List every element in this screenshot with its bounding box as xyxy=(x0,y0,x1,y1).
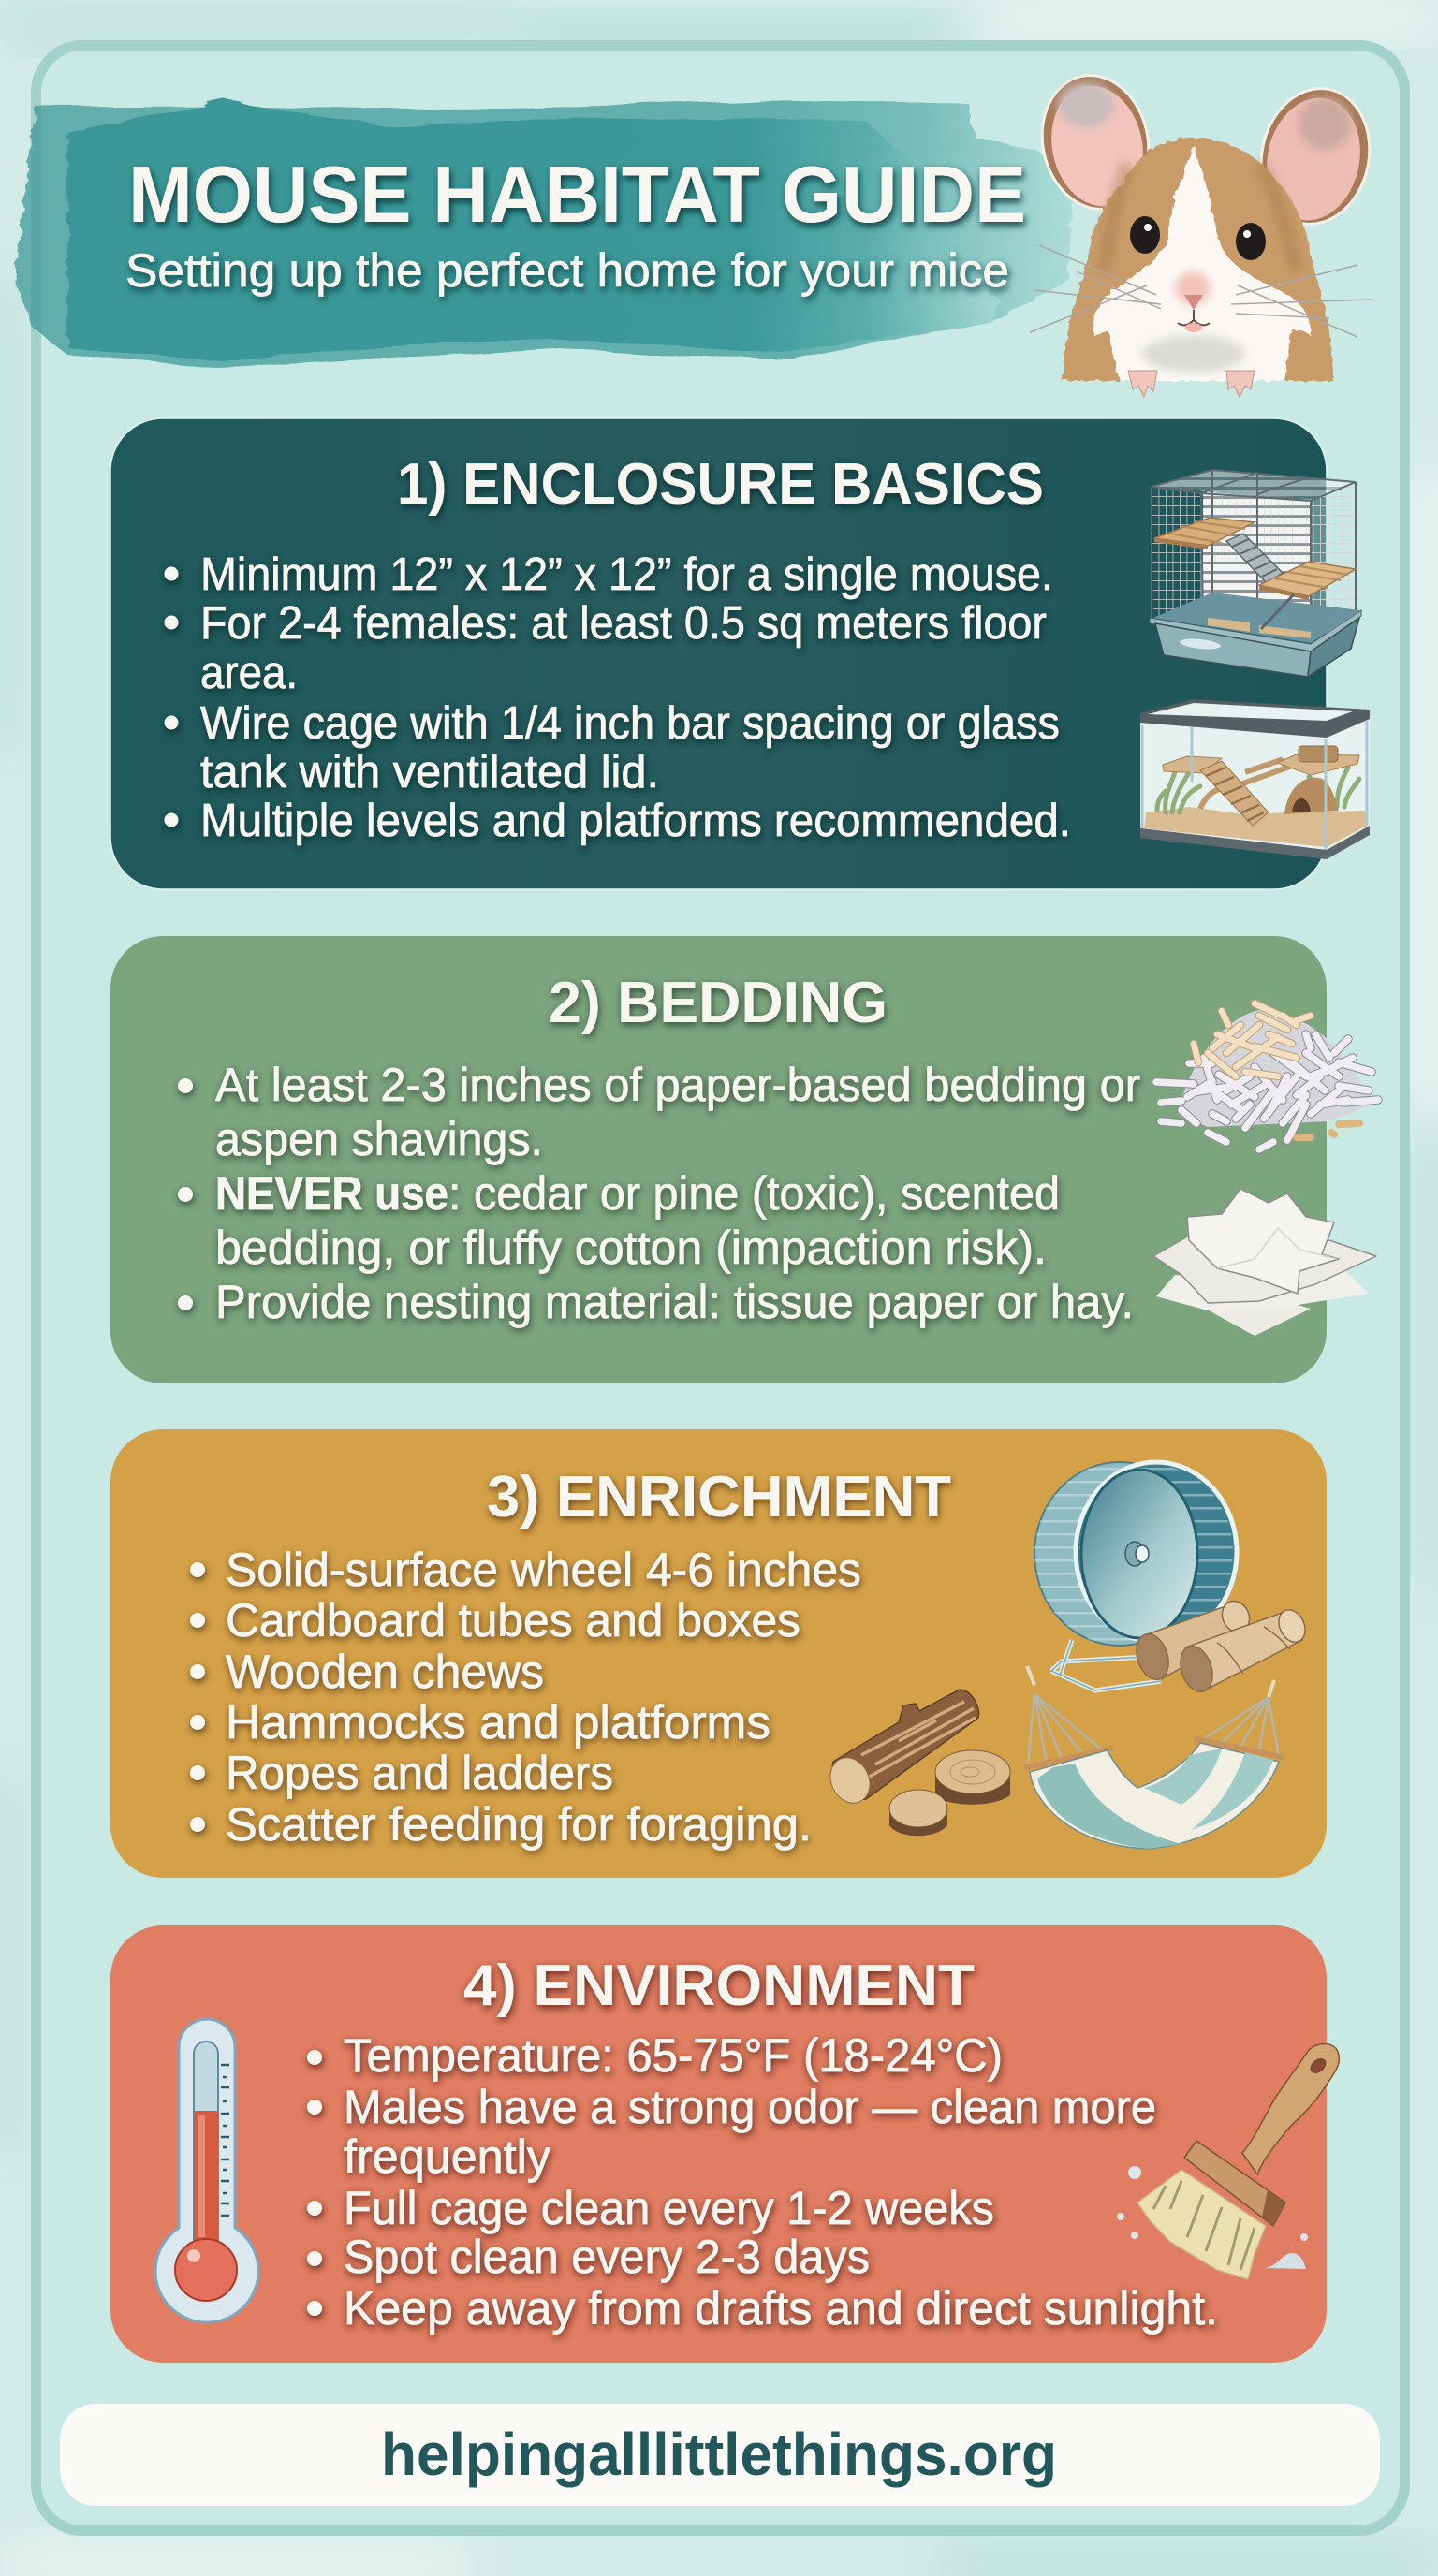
panel: enrichment xyxy=(110,1429,1327,1878)
icon: paper shavings xyxy=(1156,1003,1378,1149)
bullet list: enclosure basics: For 2-4 females: at least 0.5 sq meters floor xyxy=(200,598,1047,649)
bullet list: environment: Full cage clean every 1-2 weeks xyxy=(344,2182,994,2234)
bullet list: bedding xyxy=(178,1059,1140,1328)
bullet list: enrichment: Solid-surface wheel 4-6 inches xyxy=(226,1544,861,1596)
bullet list: environment: Males have a strong odor — clean more xyxy=(344,2081,1156,2133)
footer website banner xyxy=(60,2404,1380,2506)
bullet list: enclosure basics: Minimum 12” x 12” x 12” for a single mouse. xyxy=(200,549,1053,600)
panel: environment xyxy=(110,1925,1339,2363)
icon: wire cage xyxy=(1150,470,1361,677)
bullet list: enclosure basics: tank with ventilated lid. xyxy=(200,747,659,798)
bullet list: environment: Spot clean every 2-3 days xyxy=(344,2231,870,2283)
icon: thermometer xyxy=(155,2019,258,2322)
bullet list: enrichment: Ropes and ladders xyxy=(226,1747,613,1799)
bullet list: bedding: At least 2-3 inches of paper-based bedding or xyxy=(215,1059,1140,1111)
icon: exercise wheel xyxy=(1034,1462,1237,1690)
bullet list: enclosure basics: Wire cage with 1/4 inch bar spacing or glass xyxy=(200,698,1060,749)
bullet list: bedding: aspen shavings. xyxy=(215,1113,543,1165)
bullet list: environment: frequently xyxy=(344,2130,550,2183)
bullet list: bedding: bedding, or fluffy cotton (impaction risk). xyxy=(215,1222,1047,1274)
title: MOUSE HABITAT GUIDE xyxy=(128,151,1026,240)
bullet list: enrichment: Scatter feeding for foraging. xyxy=(226,1798,812,1851)
header watercolor band xyxy=(15,100,1074,368)
heading: environment: 4) ENVIRONMENT xyxy=(463,1954,975,2018)
icon: tissue paper xyxy=(1153,1189,1376,1336)
bullet list: enrichment xyxy=(190,1544,861,1851)
website url: helpingalllittlethings.org xyxy=(381,2421,1057,2488)
bullet list: bedding: : cedar or pine (toxic), scented xyxy=(448,1167,1060,1220)
bullet list: enrichment: Cardboard tubes and boxes xyxy=(226,1594,800,1647)
bullet list: bedding: Provide nesting material: tissue paper or hay. xyxy=(215,1276,1134,1328)
panel: enclosure basics xyxy=(110,418,1370,889)
bullet list: environment xyxy=(307,2029,1218,2334)
bullet list: enrichment: Wooden chews xyxy=(226,1646,544,1698)
heading: enrichment: 3) ENRICHMENT xyxy=(487,1465,951,1530)
subtitle: Setting up the perfect home for your mice xyxy=(125,244,1009,297)
icon: cleaning brush xyxy=(1117,2044,1339,2279)
bullet list: enclosure basics: area. xyxy=(200,648,298,698)
icon: glass tank xyxy=(1140,699,1370,859)
icon: cardboard tubes xyxy=(1131,1597,1310,1696)
bullet list: environment: Temperature: 65-75°F (18-24°C) xyxy=(344,2029,1003,2082)
bullet list: bedding: NEVER use xyxy=(215,1167,448,1220)
bullet list: enclosure basics: Multiple levels and platforms recommended. xyxy=(200,796,1071,846)
icon: wooden chews xyxy=(823,1690,1010,1836)
panel: bedding xyxy=(110,936,1378,1383)
icon: mouse xyxy=(1030,66,1382,397)
bullet list: enrichment: Hammocks and platforms xyxy=(226,1696,770,1749)
bullet list: environment: Keep away from drafts and direct sunlight. xyxy=(344,2282,1218,2334)
heading: bedding: 2) BEDDING xyxy=(549,971,888,1035)
heading: enclosure basics: 1) ENCLOSURE BASICS xyxy=(397,452,1044,517)
icon: hammock xyxy=(1026,1666,1282,1849)
bullet list: enclosure basics xyxy=(165,549,1071,846)
